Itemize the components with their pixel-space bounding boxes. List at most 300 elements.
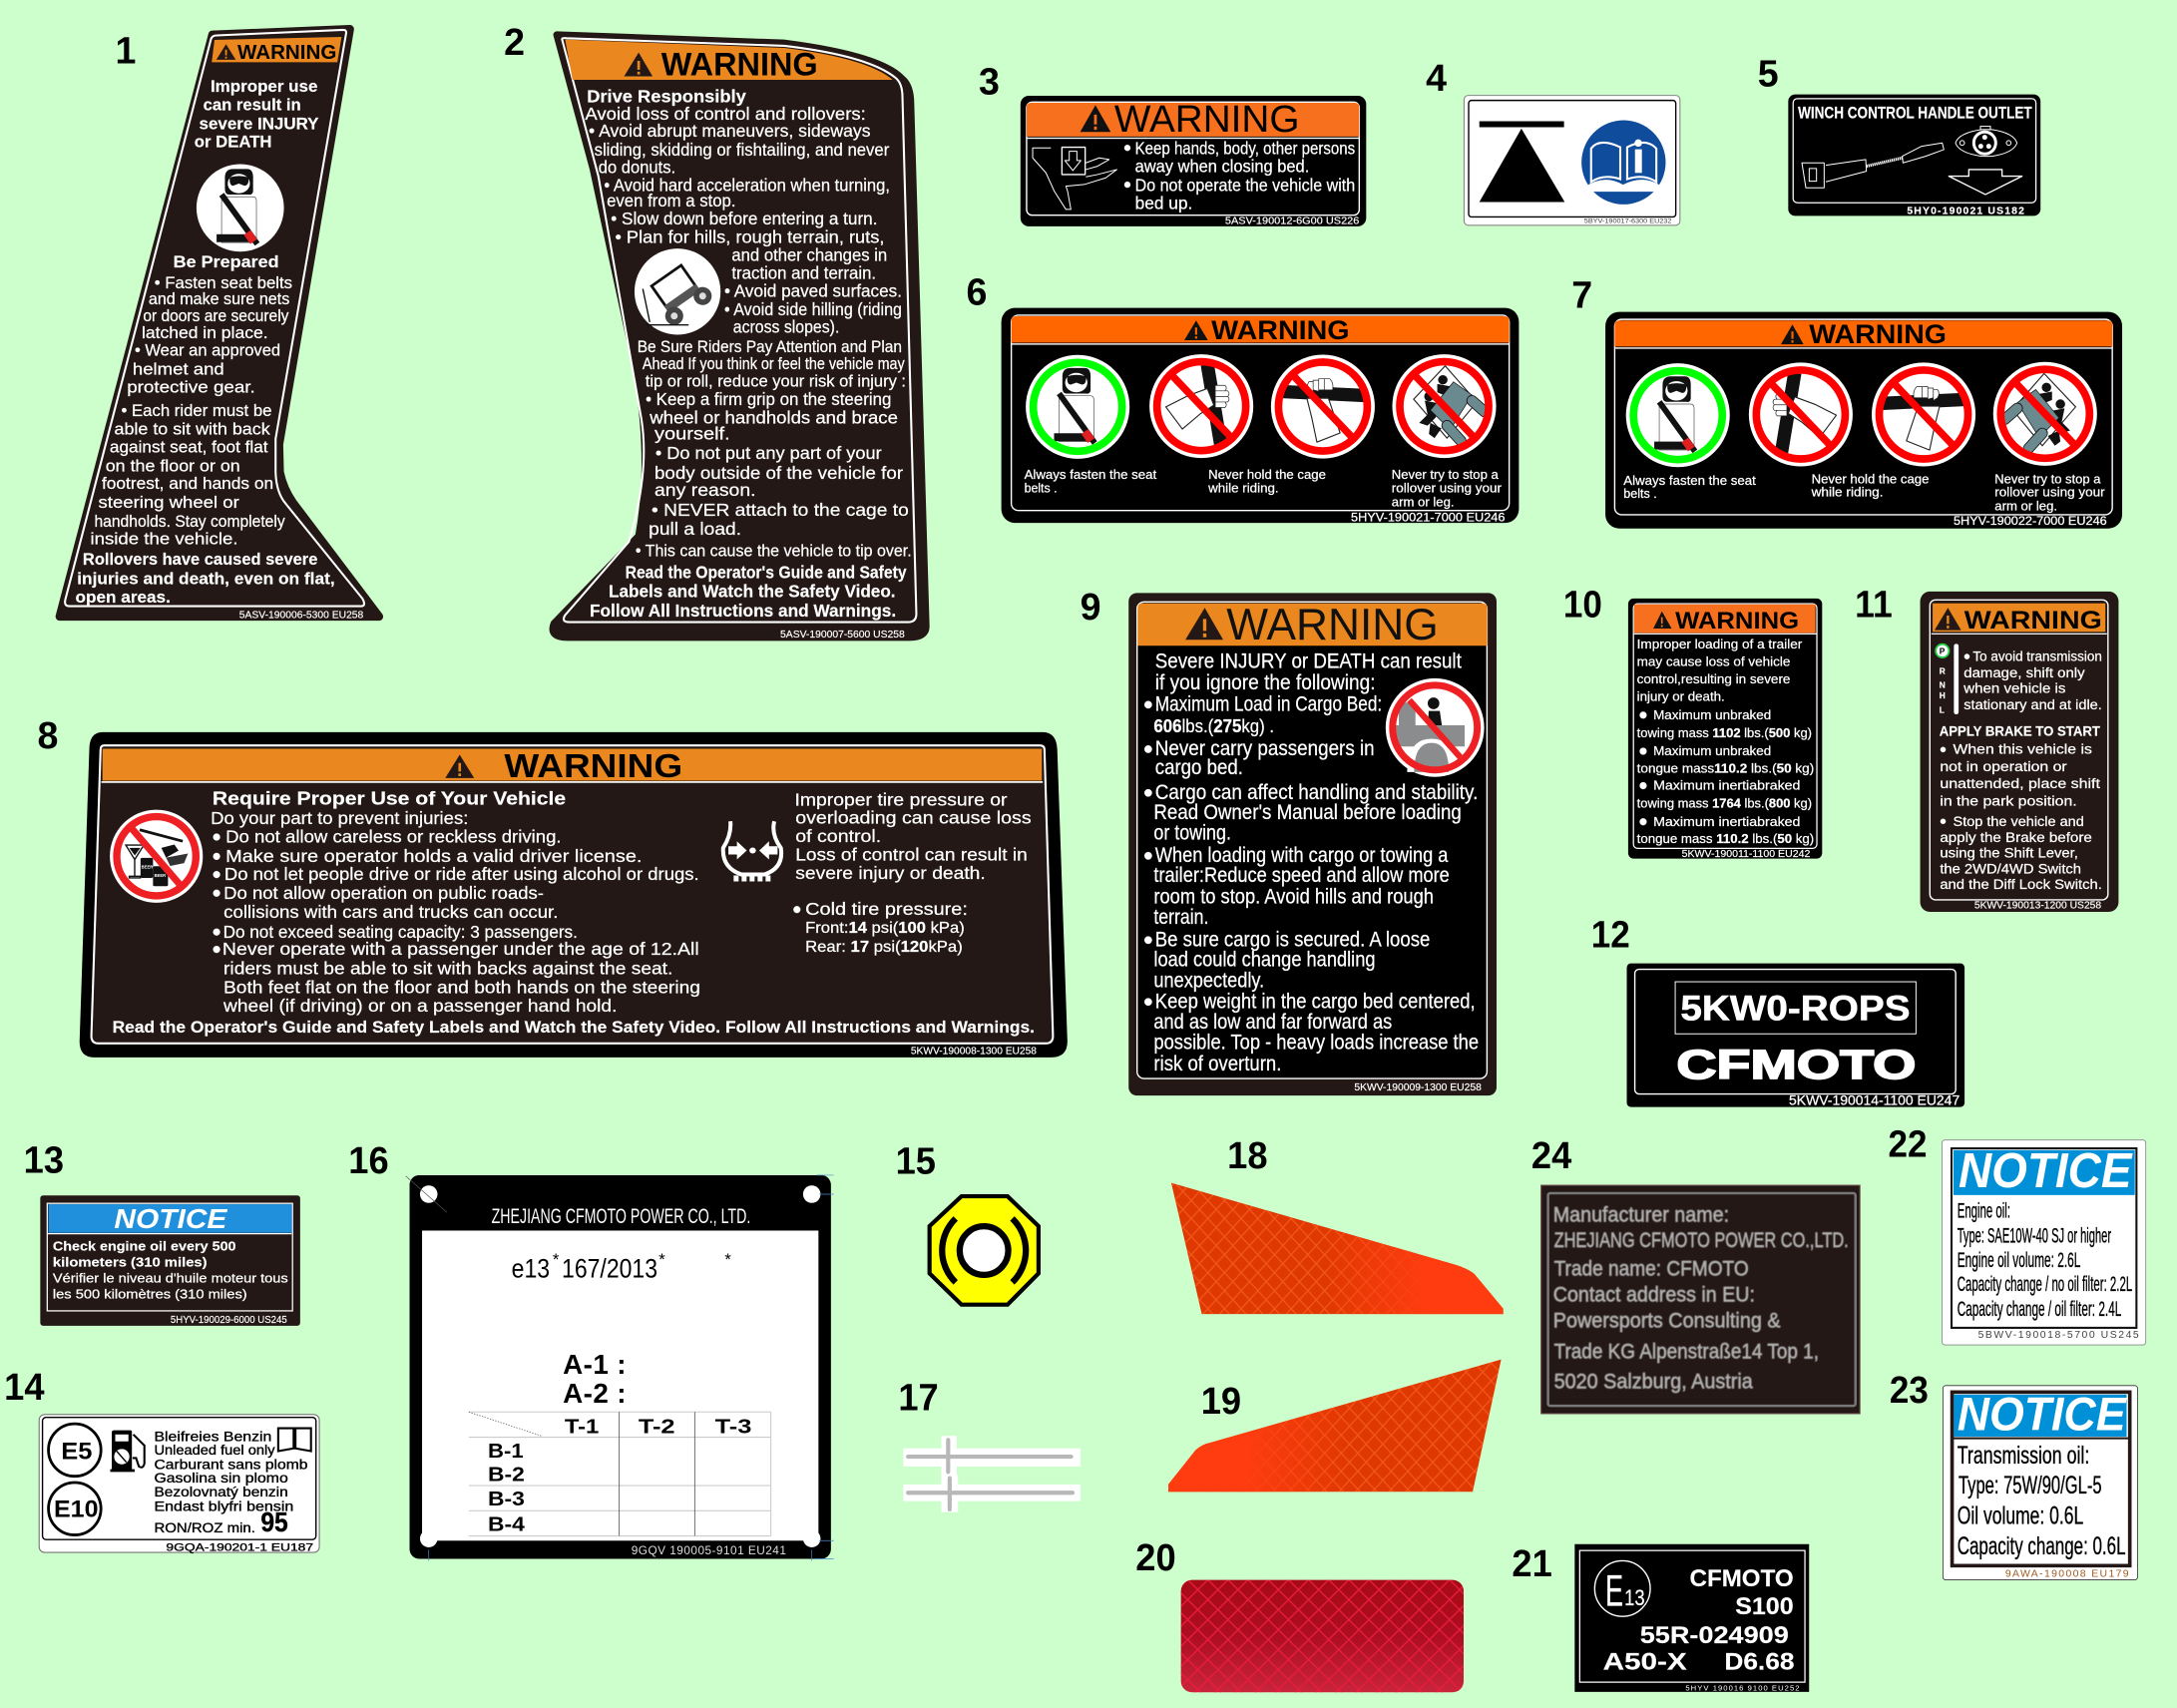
icon: down arrow	[1949, 170, 2022, 195]
panel 13 code: 5HYV-190029-6000 US245	[171, 1315, 287, 1326]
panel 6 captions: belts .	[1025, 481, 1058, 495]
panel 11 text: To avoid transmission	[1972, 648, 2102, 664]
panel 9 text: Never carry passengers in	[1155, 737, 1375, 760]
panel 3 text: bed up.	[1135, 194, 1192, 214]
panel 8 footer text: Read the Operator's Guide and Safety Labels and Watch the Safety Video. Follow All Instructions and Warnings.	[113, 1018, 1035, 1037]
panel 3 text: Do not operate the vehicle with	[1135, 176, 1355, 196]
panel 1: improper use warning	[60, 29, 379, 622]
panel 23 body	[1943, 1386, 2137, 1580]
icon: do not hold bar	[1271, 354, 1375, 459]
panel 22 header	[1954, 1150, 2135, 1195]
icon: no passengers in bed	[1386, 678, 1485, 777]
panel 5 body	[1788, 95, 2040, 215]
panel 9 text: or towing.	[1153, 822, 1231, 845]
icon: E10: E10	[54, 1497, 99, 1523]
label 18: 18	[1227, 1134, 1268, 1176]
panel 24 outline	[1548, 1193, 1856, 1406]
panel 2: drive responsibly warning	[553, 35, 926, 640]
panel 9 text: and as low and far forward as	[1153, 1011, 1392, 1034]
panel 10 text: injury or death.	[1637, 689, 1725, 704]
panel 23 code: 9AWA-190008 EU179	[2005, 1569, 2129, 1580]
panel 13 header	[49, 1204, 292, 1233]
panel 22 outline	[1952, 1148, 2136, 1328]
panel 7 header	[1614, 320, 2112, 346]
panel 8 tire text	[793, 789, 1032, 956]
panel 8: proper use warning	[80, 732, 1068, 1058]
panel 24 text: ZHEJIANG CFMOTO POWER CO.,LTD.	[1554, 1227, 1849, 1252]
panel 2 header	[565, 40, 893, 80]
label 19: 19	[1201, 1380, 1241, 1422]
panel 14 text: RON/ROZ min.	[154, 1519, 255, 1535]
panel 8 tire text: Front:14 psi(100 kPa)	[805, 920, 965, 937]
panel 3 text: away when closing bed.	[1135, 157, 1309, 177]
panel 7 captions: while riding.	[1811, 486, 1884, 500]
icon: shift gate	[1936, 643, 1959, 715]
panel 8 main text: Make sure operator holds a valid driver license.	[225, 846, 642, 866]
panel 8 outer body	[80, 732, 1068, 1058]
panel 8 divider	[102, 781, 1043, 783]
panel 2 text: pull a load.	[649, 519, 741, 539]
panel 2 text: Drive Responsibly	[587, 86, 746, 106]
panel 23 heading: NOTICE	[1958, 1388, 2127, 1441]
panel 6 header	[1012, 316, 1510, 343]
panel 14 code: 9GQA-190201-1 EU187	[166, 1542, 313, 1554]
label 4: 4	[1426, 57, 1447, 99]
panel 8 tire text: severe injury or death.	[795, 863, 986, 883]
panel 10 divider	[1633, 634, 1817, 635]
panel 21 body	[1574, 1544, 1809, 1692]
panel 24 text: Trade KG Alpenstraße14 Top 1,	[1554, 1339, 1819, 1364]
panel 10 text: may cause loss of vehicle	[1637, 653, 1790, 668]
icon: no alcohol or drugs: BEER	[155, 873, 166, 878]
panel 1 text: Improper use	[211, 77, 317, 96]
panel 21 text: D6.68	[1724, 1649, 1794, 1675]
panel 10: towing warning	[1628, 599, 1822, 860]
panel 21 text: A50-X	[1603, 1649, 1687, 1675]
panel 2 text: even from a stop.	[607, 191, 736, 211]
panel 1 text: • Each rider must be	[121, 401, 271, 420]
panel 7 code: 5HYV-190022-7000 EU246	[1954, 514, 2107, 528]
panel 13 text: Vérifier le niveau d'huile moteur tous	[53, 1271, 288, 1286]
panel 11: transmission warning	[1921, 592, 2118, 912]
panel 13 text: les 500 kilomètres (310 miles)	[53, 1286, 247, 1301]
panel 1 text: helmet and	[133, 360, 224, 379]
panel 21 text: CFMOTO	[1690, 1566, 1794, 1592]
panel 2 text: • Slow down before entering a turn.	[611, 209, 877, 228]
label 9: 9	[1081, 586, 1101, 628]
panel 16 axle labels	[563, 1349, 627, 1409]
panel 16 holes	[420, 1185, 820, 1547]
panel 2 text: tip or roll, reduce your risk of injury :	[646, 371, 906, 390]
panel 7 body	[1605, 312, 2122, 529]
panel 8 inner	[92, 745, 1053, 1044]
panel 1 text: injuries and death, even on flat,	[77, 570, 335, 589]
panel 9 text: Read Owner's Manual before loading	[1153, 801, 1462, 824]
panel 16 approval number: *	[724, 1250, 731, 1269]
panel 21 text: 55R-024909	[1640, 1623, 1789, 1649]
panel 9 text: load could change handling	[1153, 948, 1376, 971]
panel 6 captions: Never hold the cage	[1208, 468, 1326, 482]
panel 13 heading: NOTICE	[114, 1203, 228, 1234]
label 10: 10	[1563, 584, 1602, 626]
panel 16: manufacturer plate	[406, 1175, 834, 1560]
icon: do not hold cage	[1749, 362, 1853, 467]
panel 14 text: Bezolovnatý benzin	[154, 1484, 288, 1499]
label 22: 22	[1889, 1123, 1928, 1165]
panel 14 outline	[43, 1418, 316, 1539]
panel 8 heading: WARNING	[504, 748, 682, 785]
label 5: 5	[1758, 52, 1779, 94]
panel 1 outline	[65, 30, 364, 607]
panel 9 text: Severe INJURY or DEATH can result	[1155, 649, 1462, 672]
panel 8 main text: Do your part to prevent injuries:	[211, 808, 468, 828]
panel 2 text: sliding, skidding or fishtailing, and never	[595, 140, 890, 160]
icon: do not stop rollover	[1392, 354, 1497, 458]
panel 16 table: T-3	[715, 1416, 751, 1438]
panel 2 text: Follow All Instructions and Warnings.	[590, 601, 896, 621]
panel 2 outline	[562, 38, 916, 623]
panel 7 captions: rollover using your	[1994, 486, 2105, 500]
panel 3 body	[1021, 96, 1366, 226]
panel 6 captions: arm or leg.	[1392, 495, 1455, 509]
panel 3 text	[1124, 138, 1355, 214]
icon: shift gate: H	[1940, 690, 1946, 700]
panel 2 text: do donuts.	[599, 157, 675, 177]
panel 2 text: and other changes in	[731, 245, 887, 265]
icon: no alcohol or drugs	[110, 810, 203, 903]
icon: do not stop rollover	[1993, 362, 2097, 466]
icon: E10	[49, 1483, 101, 1535]
panel 21 outline	[1579, 1550, 1805, 1682]
panel 12 logo: CFMOTO	[1676, 1042, 1916, 1087]
panel 2 text	[585, 86, 912, 621]
panel 1 text: on the floor or on	[106, 456, 240, 475]
panel 10 text: towing mass 1764 lbs.(800 kg)	[1637, 796, 1812, 811]
label 24: 24	[1531, 1134, 1571, 1176]
panel 2 text: • Keep a firm grip on the steering	[646, 389, 891, 409]
panel 16 table: B-3	[488, 1489, 525, 1510]
label 17: 17	[898, 1376, 939, 1418]
panel 5 code: 5HY0-190021 US182	[1907, 206, 2024, 216]
panel 14 body	[39, 1415, 319, 1552]
panel 16 body	[410, 1175, 831, 1559]
panel 23 outline	[1953, 1392, 2130, 1565]
label 3: 3	[979, 61, 1000, 103]
panel 12 box	[1675, 982, 1916, 1034]
panel 23 header	[1954, 1395, 2126, 1437]
panel 16 approval number: *	[658, 1250, 665, 1269]
panel 12 code text: 5KW0-ROPS	[1680, 990, 1911, 1028]
panel 2 text: • Avoid paved surfaces.	[724, 280, 902, 300]
panel 7 outline	[1614, 319, 2112, 515]
panel 3 header	[1027, 103, 1359, 137]
icon: warning triangle	[1935, 608, 1961, 631]
panel 7 heading: WARNING	[1809, 319, 1947, 349]
icon 20: rectangular reflector	[1181, 1580, 1464, 1692]
panel 21: approval plate	[1574, 1544, 1809, 1692]
panel 10 text: tongue mass 110.2 lbs.(50 kg)	[1637, 831, 1814, 846]
panel 16 table: T-1	[565, 1416, 599, 1438]
panel 1 text: latched in place.	[142, 323, 268, 342]
panel 2 text: yourself.	[654, 423, 730, 443]
panel 14 text: Endast blyfri bensin	[154, 1497, 293, 1513]
panel 16 axle labels: A-2 :	[563, 1378, 627, 1409]
panel 7 captions: Never hold the cage	[1812, 472, 1929, 486]
panel 11 text: using the Shift Lever,	[1940, 845, 2078, 861]
icon: shift gate: P	[1940, 646, 1946, 656]
panel 2 text: • Avoid side hilling (riding	[724, 299, 902, 319]
panel 8 main text: wheel (if driving) or on a passenger hand hold.	[222, 996, 617, 1016]
panel 1 shape	[60, 29, 379, 617]
icon: seat belt	[197, 165, 284, 251]
panel 1 heading: WARNING	[237, 42, 336, 64]
icon: tire pressure	[723, 821, 781, 879]
panel 8 tire text: of control.	[795, 826, 881, 846]
panel 3 text: Keep hands, body, other persons	[1135, 138, 1355, 158]
panel 6 captions	[1025, 468, 1502, 509]
panel 8 main text	[211, 788, 700, 1016]
icon: book	[278, 1429, 311, 1452]
panel 1 text: severe INJURY	[200, 114, 319, 133]
panel 10 text: Maximum unbraked	[1653, 743, 1771, 758]
label 21: 21	[1512, 1542, 1552, 1584]
panel 8 main text: collisions with cars and trucks can occur.	[223, 902, 558, 922]
panel 23 text: Oil volume: 0.6L	[1958, 1501, 2083, 1529]
panel 7 captions: arm or leg.	[1994, 500, 2057, 514]
label 12: 12	[1591, 913, 1630, 955]
panel 11 text	[1940, 648, 2102, 892]
panel 9 body	[1128, 593, 1497, 1095]
panel 9 text: Maximum Load in Cargo Bed:	[1155, 693, 1382, 716]
icon: E5	[49, 1424, 101, 1477]
icon: winch handle plug	[1802, 143, 1944, 188]
label 13: 13	[24, 1138, 64, 1180]
panel 10 body	[1628, 599, 1822, 859]
panel 6 captions: rollover using your	[1392, 481, 1502, 495]
panel 8 main text: riders must be able to sit with backs against the seat.	[223, 959, 672, 979]
panel 1 text: or DEATH	[195, 133, 271, 152]
panel 16 table: T-2	[639, 1416, 675, 1438]
icon: warning triangle	[1185, 608, 1223, 640]
panel 16 approval number: e13	[512, 1254, 550, 1284]
icon: read manual	[1581, 121, 1665, 205]
icon: do not hold cage	[1149, 354, 1253, 458]
panel 13 outline	[47, 1203, 292, 1311]
panel 16 white area	[422, 1230, 818, 1540]
panel 2 text: Ahead If you think or feel the vehicle may	[643, 354, 905, 373]
panel 4 body	[1464, 96, 1680, 225]
panel 24 text: Trade name: CFMOTO	[1554, 1255, 1749, 1280]
panel 2 text: • Avoid abrupt maneuvers, sideways	[589, 121, 871, 141]
panel 1 text: • Wear an approved	[135, 340, 280, 359]
panel 7: four pictogram warning	[1605, 312, 2122, 529]
panel 24 text: Contact address in EU:	[1553, 1281, 1755, 1306]
panel 10 text: towing mass 1102 lbs.(500 kg)	[1637, 725, 1812, 740]
panel 9 text: cargo bed.	[1155, 756, 1243, 779]
panel 2 code: 5ASV-190007-5600 US258	[780, 630, 905, 640]
panel 23: transmission oil notice	[1943, 1386, 2137, 1580]
panel 24 body	[1541, 1185, 1860, 1414]
label 2: 2	[504, 21, 525, 63]
panel 4: load and manual pictogram	[1464, 96, 1680, 225]
icon: warning triangle	[1081, 105, 1110, 132]
label 23: 23	[1890, 1369, 1929, 1411]
panel 10 header	[1634, 605, 1816, 633]
panel 22 text: Engine oil volume: 2.6L	[1958, 1249, 2080, 1272]
panel 16 approval number	[512, 1250, 731, 1284]
panel 12: ROPS plate	[1627, 964, 1964, 1108]
panel 10 code: 5KWV-190011-1100 EU242	[1682, 849, 1810, 860]
panel 11 text: when vehicle is	[1962, 680, 2065, 696]
panel 5 heading: WINCH CONTROL HANDLE OUTLET	[1798, 103, 2032, 122]
panel 23 text: Type: 75W/90/GL-5	[1959, 1472, 2102, 1499]
panel 6 body	[1002, 308, 1519, 523]
icon: hand in bed	[1033, 148, 1116, 210]
panel 3 outline	[1027, 102, 1359, 215]
panel 11 text: apply the Brake before	[1940, 829, 2092, 845]
panel 8 tire text: Cold tire pressure:	[805, 899, 968, 919]
panel 1 text: Be Prepared	[174, 252, 279, 271]
icon 19: red reflector	[1168, 1360, 1502, 1492]
panel 8 tire text: Loss of control can result in	[795, 845, 1028, 865]
panel 16 code: 9GQV 190005-9101 EU241	[632, 1543, 786, 1557]
icon: warning triangle	[1781, 324, 1804, 344]
panel 2 shape	[553, 35, 926, 638]
panel 14 text	[154, 1428, 308, 1537]
panel 1 text: can result in	[204, 96, 301, 115]
panel 5: winch control handle outlet	[1788, 95, 2040, 216]
panel 4 code: 5BYV-190017-6300 EU232	[1584, 217, 1672, 224]
icon: E13 mark: E	[1605, 1567, 1623, 1616]
panel 2 text: any reason.	[654, 480, 756, 500]
panel 11 text: and the Diff Lock Switch.	[1940, 876, 2102, 892]
panel 16 approval number: *	[553, 1250, 560, 1269]
panel 22 text: Engine oil:	[1958, 1200, 2010, 1223]
icon: E13 mark: 13	[1624, 1585, 1645, 1610]
panel 2 text: • Do not put any part of your	[655, 443, 882, 463]
panel 1 text: steering wheel or	[99, 493, 239, 512]
icon 15: yellow octagon hub	[930, 1196, 1039, 1305]
icon: no alcohol or drugs: BEER	[142, 865, 153, 870]
panel 11 divider	[1932, 634, 2107, 635]
panel 11 text: the 2WD/4WD Switch	[1940, 860, 2081, 876]
panel 10 heading: WARNING	[1675, 609, 1799, 635]
panel 14 text: 95	[260, 1506, 288, 1537]
panel 2 text: • This can cause the vehicle to tip over.	[636, 541, 912, 560]
panel 22 body	[1943, 1140, 2146, 1345]
panel 13 body	[40, 1195, 300, 1326]
panel 6 code: 5HYV-190021-7000 EU246	[1351, 511, 1506, 525]
panel 11 code: 5KWV-190013-1200 US258	[1974, 901, 2101, 912]
panel 21 code: 5HYV 190016 9100 EU252	[1685, 1683, 1799, 1692]
icon: warning triangle	[217, 44, 235, 60]
panel 21 text	[1603, 1566, 1794, 1675]
panel 11 heading: WARNING	[1964, 607, 2102, 635]
panel 11 text: APPLY BRAKE TO START	[1940, 722, 2100, 738]
panel 7 captions: Never try to stop a	[1994, 472, 2100, 486]
panel 2 text: Labels and Watch the Safety Video.	[609, 582, 896, 602]
icon: rollover	[635, 248, 720, 334]
panel 6 divider	[1012, 343, 1510, 345]
icon: load bar	[1480, 122, 1564, 127]
panel 5 outline	[1793, 99, 2036, 203]
panel 23 divider	[1953, 1438, 2128, 1440]
icon 17: rivets	[903, 1436, 1081, 1512]
panel 9: cargo warning	[1128, 593, 1497, 1095]
panel 2 text: Be Sure Riders Pay Attention and Plan	[638, 337, 902, 356]
panel 1 text	[76, 77, 335, 607]
panel 8 tire text: overloading can cause loss	[795, 807, 1032, 827]
panel 9 text: When loading with cargo or towing a	[1155, 844, 1449, 867]
label 1: 1	[116, 29, 136, 71]
panel 14: fuel label	[39, 1415, 319, 1554]
icon: warning triangle	[445, 754, 474, 778]
panel 22 text	[1958, 1200, 2132, 1321]
panel 6 captions: while riding.	[1207, 481, 1279, 495]
panel 9 text: Be sure cargo is secured. A loose	[1155, 928, 1430, 951]
panel 11 outline	[1930, 600, 2108, 900]
panel 8 main text: Both feet flat on the floor and both hands on the steering	[223, 977, 700, 997]
panel 3 code: 5ASV-190012-6G00 US226	[1225, 215, 1359, 226]
panel 6 captions: Never try to stop a	[1392, 468, 1499, 482]
panel 9 text: terrain.	[1153, 906, 1208, 929]
panel 1 text: • Fasten seat belts	[155, 273, 292, 292]
icon: E13 mark	[1594, 1560, 1650, 1616]
panel 1 text: protective gear.	[127, 378, 255, 397]
panel 12 part code: 5KWV-190014-1100 EU247	[1789, 1092, 1959, 1108]
panel 6 outline	[1012, 315, 1510, 511]
panel 7 captions: Always fasten the seat	[1623, 474, 1756, 488]
panel 10 text: Maximum unbraked	[1653, 707, 1771, 722]
panel 1 text: against seat, foot flat	[110, 437, 268, 456]
panel 13 text: Check engine oil every 500	[53, 1239, 236, 1254]
panel 24 text: Manufacturer name:	[1553, 1201, 1729, 1226]
panel 9 code: 5KWV-190009-1300 EU258	[1354, 1082, 1482, 1093]
icon: warning triangle	[1653, 612, 1671, 629]
panel 2 heading: WARNING	[661, 47, 818, 83]
panel 23 text: Transmission oil:	[1958, 1442, 2089, 1470]
panel 7 captions: belts .	[1623, 487, 1657, 501]
panel 16 table: B-1	[488, 1441, 524, 1463]
icon: do not hold bar	[1872, 362, 1975, 467]
panel 11 header	[1933, 604, 2105, 632]
panel 13 text	[53, 1239, 288, 1301]
panel 2 text: Avoid loss of control and rollovers:	[585, 104, 866, 124]
panel 8 tire text: Improper tire pressure or	[795, 789, 1008, 809]
panel 8 main text: Do not allow careless or reckless driving.	[225, 827, 562, 847]
panel 11 text: Stop the vehicle and	[1954, 813, 2084, 829]
panel 1 text: footrest, and hands on	[102, 474, 273, 493]
panel 1 text: and make sure nets	[149, 289, 289, 308]
panel 8 header	[103, 748, 1042, 781]
panel 11 text: not in operation or	[1940, 758, 2067, 774]
icon: triangle	[1480, 129, 1564, 203]
icon: E5: E5	[61, 1440, 92, 1466]
panel 2 text: body outside of the vehicle for	[654, 463, 903, 483]
panel 24 text: 5020 Salzburg, Austria	[1554, 1369, 1753, 1394]
panel 22 heading: NOTICE	[1959, 1144, 2133, 1198]
panel 8 main text: Do not let people drive or ride after using alcohol or drugs.	[224, 864, 699, 884]
label 7: 7	[1571, 273, 1592, 315]
panel 12 body	[1627, 964, 1964, 1107]
panel 10 text	[1637, 637, 1814, 846]
panel 14 text: Carburant sans plomb	[154, 1456, 308, 1472]
panel 8 main text: Do not allow operation on public roads-	[223, 883, 544, 903]
panel 16 table: B-2	[488, 1464, 525, 1486]
label 6: 6	[967, 271, 987, 313]
icon: shift gate: R	[1940, 666, 1946, 676]
panel 1 header	[212, 37, 341, 62]
